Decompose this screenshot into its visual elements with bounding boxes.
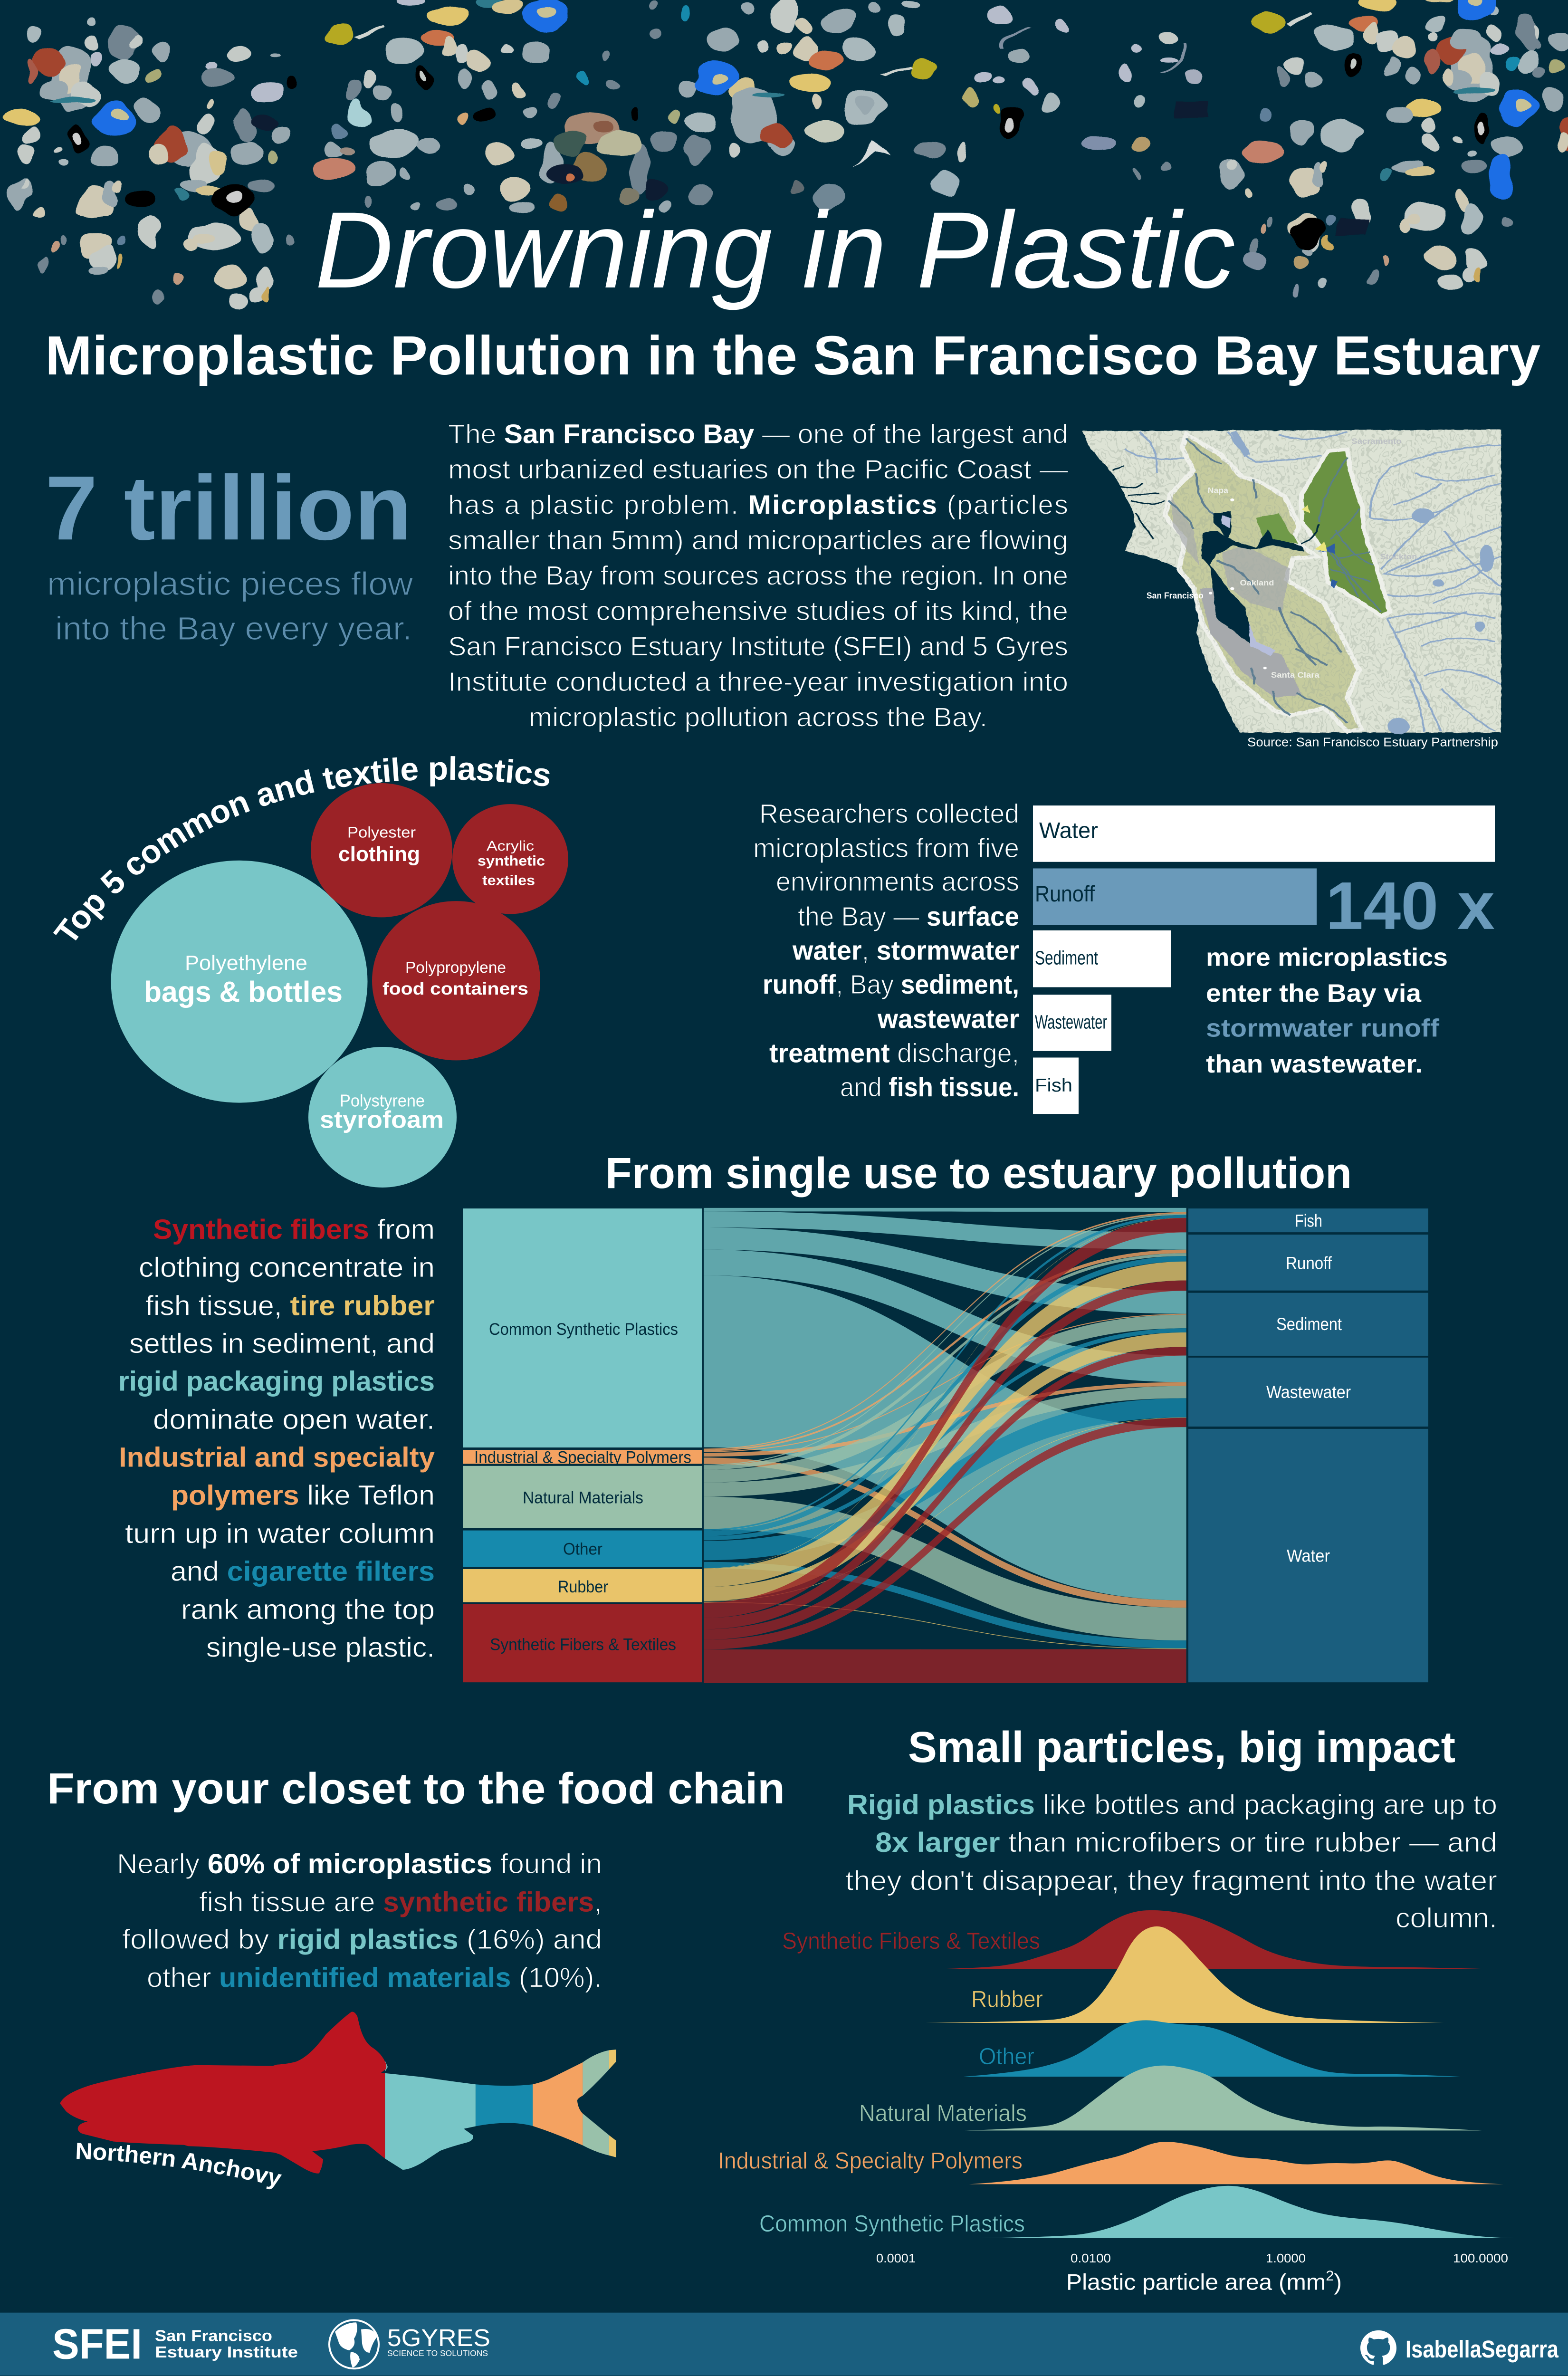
text block: synthetic fibers: rank among the top — [181, 1593, 435, 1625]
text block: synthetic fibers — [118, 1213, 435, 1663]
sankey source nodes: Rubber — [558, 1577, 608, 1596]
bubble: acrylic — [452, 804, 568, 914]
text block: rigid plastics: 8x larger than microfibers or tire rubber — and — [875, 1827, 1497, 1858]
intro text block: of the most comprehensive studies of its kind, the — [448, 596, 1068, 626]
bubble: polypropylene — [372, 901, 540, 1060]
text block: synthetic fibers: turn up in water column — [125, 1518, 435, 1549]
bubble: polyester: Polyester — [347, 824, 416, 841]
bar: fish: Fish — [1035, 1075, 1072, 1096]
text block: researchers collected: wastewater — [877, 1004, 1019, 1035]
bar: fish — [1033, 1057, 1079, 1114]
text block: nearly 60 percent: Nearly 60% of microplastics found in — [117, 1848, 602, 1879]
sankey flows — [704, 1208, 1186, 1683]
logo: SFEI: Estuary Institute — [155, 2344, 298, 2361]
stat: 7 trillion: microplastic pieces flow — [47, 565, 413, 602]
sankey target nodes: Sediment — [1276, 1314, 1342, 1334]
bubble: polystyrene: styrofoam — [320, 1106, 444, 1133]
text block: synthetic fibers: polymers like Teflon — [171, 1479, 435, 1511]
sankey source nodes: Industrial & Specialty Polymers — [474, 1448, 691, 1466]
bar: water: Water — [1039, 818, 1098, 843]
callout: 140x: more microplastics — [1206, 944, 1448, 971]
heading: small particles big impact: Small particles, big impact — [908, 1723, 1455, 1772]
intro text block: microplastic pollution across the Bay. — [529, 702, 987, 732]
fish caption: Northern Anchovy — [75, 2138, 284, 2192]
bubble: polypropylene: Polypropylene — [405, 959, 506, 977]
text block: synthetic fibers: clothing concentrate in — [139, 1252, 435, 1283]
ridgeline curves — [926, 1910, 1515, 2238]
callout: 140x: enter the Bay via — [1206, 979, 1422, 1007]
ridgeline category labels: Natural Materials — [859, 2100, 1027, 2127]
sankey target nodes: Water — [1287, 1546, 1330, 1565]
callout: 140x: stormwater runoff — [1206, 1015, 1439, 1042]
curved heading: top 5 plastics: Top 5 common and textile plastics — [47, 750, 553, 951]
text block: researchers collected: environments across — [776, 867, 1019, 897]
sankey chart — [463, 1208, 1428, 1683]
ridgeline x axis: 100.0000 — [1453, 2252, 1508, 2265]
map of San Francisco Bay watershed — [1082, 430, 1501, 734]
text block: researchers collected: the Bay — surface — [798, 902, 1019, 932]
ridgeline x axis — [876, 2252, 1508, 2295]
map source caption: Source: San Francisco Estuary Partnership — [1247, 736, 1498, 749]
bubble chart: top 5 plastics — [111, 783, 568, 1188]
text block: synthetic fibers: settles in sediment, and — [129, 1328, 435, 1359]
bubble: polyethylene: bags & bottles — [144, 976, 343, 1008]
logo: 5 Gyres globe — [329, 2320, 490, 2368]
map of San Francisco Bay watershed: Stockton — [1380, 553, 1417, 561]
ridgeline chart: particle area — [718, 1910, 1515, 2295]
logo: SFEI: SFEI — [52, 2321, 142, 2368]
bar: sediment — [1033, 930, 1171, 987]
text block: nearly 60 percent: fish tissue are synthetic fibers, — [199, 1886, 602, 1917]
text block: researchers collected: water, stormwater — [792, 936, 1019, 966]
subtitle: Microplastic Pollution in the San Francisco Bay Estuary — [45, 325, 1540, 386]
intro text block: San Francisco Estuary Institute (SFEI) and 5 Gyres — [448, 632, 1068, 661]
callout: 140x: 140 x — [1326, 868, 1495, 944]
bar chart: environments — [1033, 805, 1495, 1114]
logo: 5 Gyres globe: 5GYRES — [387, 2324, 490, 2351]
text block: synthetic fibers: single-use plastic. — [206, 1631, 435, 1663]
ridgeline category labels: Synthetic Fibers & Textiles — [782, 1928, 1040, 1954]
text block: rigid plastics: column. — [1396, 1902, 1497, 1934]
text block: synthetic fibers: dominate open water. — [153, 1403, 435, 1435]
ridgeline x axis: 2 — [1326, 2268, 1334, 2284]
map of San Francisco Bay watershed: Santa Clara — [1271, 671, 1319, 680]
sankey source nodes: Common Synthetic Plastics — [489, 1320, 678, 1339]
text block: researchers collected: microplastics from five — [753, 833, 1019, 863]
bubble: acrylic: synthetic — [478, 853, 545, 869]
ridgeline category labels: Industrial & Specialty Polymers — [718, 2148, 1023, 2174]
text block: rigid plastics: Rigid plastics like bottles and packaging are up to — [847, 1789, 1497, 1820]
text block: synthetic fibers: Synthetic fibers from — [153, 1213, 435, 1245]
text block: researchers collected: and fish tissue. — [840, 1072, 1019, 1102]
logo: 5 Gyres globe: SCIENCE TO SOLUTIONS — [387, 2348, 488, 2358]
text block: rigid plastics — [845, 1789, 1497, 1934]
stat: 7 trillion: 7 trillion — [45, 457, 412, 559]
stat: 7 trillion: into the Bay every year. — [55, 610, 412, 647]
intro text block: into the Bay from sources across the region. In one — [448, 561, 1068, 591]
bar: wastewater — [1033, 995, 1111, 1051]
text block: nearly 60 percent — [117, 1848, 602, 1993]
text block: researchers collected: runoff, Bay sediment, — [763, 970, 1019, 1000]
sankey target nodes: Fish — [1295, 1211, 1322, 1230]
text block: rigid plastics: they don't disappear, they fragment into the water — [845, 1865, 1497, 1896]
logo: SFEI: San Francisco — [155, 2328, 272, 2345]
ridgeline x axis: 0.0001 — [876, 2252, 916, 2265]
bubble: polyethylene — [111, 861, 368, 1103]
intro text block: has a plastic problem. Microplastics (particles — [448, 490, 1068, 520]
bar: water — [1033, 805, 1495, 862]
bar: runoff — [1033, 868, 1317, 925]
text block: researchers collected: Researchers collected — [759, 799, 1019, 829]
intro text block: most urbanized estuaries on the Pacific Coast — — [448, 454, 1069, 485]
intro text block — [448, 419, 1069, 732]
bubble: polystyrene — [308, 1047, 457, 1188]
sankey source nodes: Natural Materials — [523, 1488, 643, 1507]
ridgeline category labels — [718, 1928, 1043, 2237]
bubble: polyester — [311, 783, 452, 917]
bar: runoff: Runoff — [1035, 881, 1095, 907]
logo: SFEI — [52, 2321, 298, 2368]
ridgeline x axis: 0.0100 — [1071, 2252, 1111, 2265]
sankey source nodes — [463, 1208, 702, 1682]
bubble: acrylic: Acrylic — [487, 838, 534, 854]
map of San Francisco Bay watershed: Sacramento — [1352, 438, 1401, 446]
bubble: polystyrene: Polystyrene — [340, 1091, 425, 1110]
ridgeline x axis: ) — [1334, 2270, 1342, 2295]
text block: researchers collected: treatment discharge, — [769, 1038, 1019, 1068]
text block: researchers collected — [753, 799, 1019, 1102]
ridgeline category labels: Rubber — [971, 1986, 1043, 2012]
ridgeline x axis: Plastic particle area (mm — [1066, 2270, 1317, 2295]
icon and handle: GitHub IsabellaSegarra — [1360, 2330, 1558, 2365]
ridgeline category labels: Common Synthetic Plastics — [759, 2211, 1025, 2237]
sankey source nodes: Other — [563, 1540, 602, 1558]
text block: synthetic fibers: Industrial and specialty — [119, 1441, 435, 1473]
callout: 140x — [1206, 868, 1495, 1078]
footer band — [0, 2313, 1568, 2376]
decorative microplastic particles banner — [0, 0, 1568, 327]
ridgeline category labels: Other — [979, 2044, 1034, 2069]
bar: sediment: Sediment — [1035, 947, 1098, 968]
map of San Francisco Bay watershed: Napa — [1208, 487, 1228, 495]
title: Drowning in Plastic — [315, 189, 1235, 310]
heading: from your closet to the food chain: From your closet to the food chain — [47, 1764, 785, 1813]
callout: 140x: than wastewater. — [1206, 1050, 1423, 1078]
stat: 7 trillion — [45, 457, 413, 647]
sankey source nodes: Synthetic Fibers & Textiles — [490, 1635, 676, 1654]
bar: wastewater: Wastewater — [1035, 1011, 1107, 1033]
bubble: acrylic: textiles — [482, 873, 535, 889]
bubble: polyester: clothing — [338, 843, 420, 866]
text block: nearly 60 percent: other unidentified materials (10%). — [147, 1962, 602, 1993]
text block: synthetic fibers: rigid packaging plastics — [118, 1365, 435, 1397]
map of San Francisco Bay watershed: San Francisco — [1147, 591, 1204, 601]
bubble: polypropylene: food containers — [382, 978, 528, 998]
sankey target nodes: Wastewater — [1266, 1382, 1351, 1402]
map of San Francisco Bay watershed: Oakland — [1240, 579, 1274, 587]
intro text block: Institute conducted a three-year investigation into — [448, 667, 1068, 697]
bubble: polyethylene: Polyethylene — [185, 952, 307, 975]
intro text block: The San Francisco Bay — one of the largest and — [448, 419, 1068, 449]
text block: synthetic fibers: fish tissue, tire rubber — [145, 1290, 435, 1322]
text block: nearly 60 percent: followed by rigid plastics (16%) and — [122, 1924, 602, 1955]
intro text block: smaller than 5mm) and microparticles are flowing — [448, 525, 1068, 556]
fish diagram: northern anchovy — [60, 2012, 616, 2192]
heading: from single use to estuary pollution: From single use to estuary pollution — [605, 1149, 1352, 1198]
sankey target nodes — [1188, 1208, 1428, 1682]
text block: synthetic fibers: and cigarette filters — [171, 1555, 435, 1587]
sankey target nodes: Runoff — [1286, 1253, 1332, 1273]
ridgeline x axis: 1.0000 — [1266, 2252, 1306, 2265]
